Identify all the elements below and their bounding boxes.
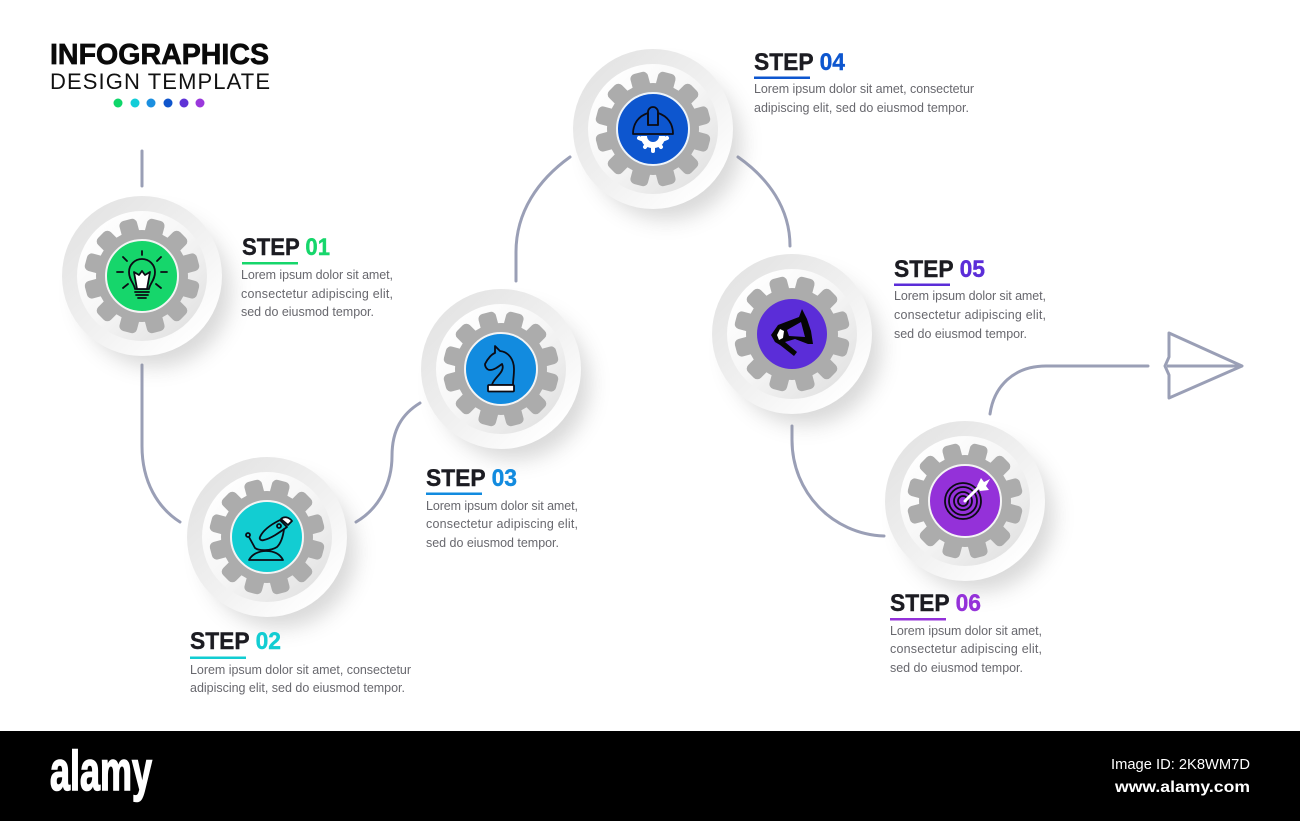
step 5 text: STEP 05 — [894, 256, 985, 283]
step 5 text — [894, 256, 1046, 341]
step 6 text: STEP 06 — [890, 590, 981, 617]
step 4 node — [573, 49, 742, 220]
step 4 text: Lorem ipsum dolor sit amet, consectetur — [754, 82, 974, 96]
step 2 text: STEP 02 — [190, 628, 281, 655]
step 1 text: consectetur adipiscing elit, — [241, 287, 393, 301]
step 5 text: consectetur adipiscing elit, — [894, 308, 1046, 322]
step 6 text: sed do eiusmod tempor. — [890, 661, 1023, 675]
step 2 text: adipiscing elit, sed do eiusmod tempor. — [190, 681, 405, 695]
footer bar — [0, 731, 1300, 821]
step 6 text: Lorem ipsum dolor sit amet, — [890, 624, 1042, 638]
icon: microscope — [246, 517, 292, 560]
step 6 text: consectetur adipiscing elit, — [890, 642, 1042, 656]
icon: light bulb — [117, 251, 167, 298]
colour dots — [114, 98, 204, 108]
step 3 text: STEP 03 — [426, 465, 517, 492]
step 3 node — [421, 289, 590, 460]
icon: helmet with gear — [633, 107, 673, 151]
step 6 text — [890, 590, 1042, 675]
step 1 text: STEP 01 — [242, 234, 330, 261]
step 2 text: Lorem ipsum dolor sit amet, consectetur — [190, 663, 411, 677]
step 2 node — [187, 457, 356, 628]
icon: paper plane arrow — [1165, 333, 1242, 398]
step 3 text: consectetur adipiscing elit, — [426, 517, 578, 531]
step 5 text: sed do eiusmod tempor. — [894, 327, 1027, 341]
image id text: Image ID: 2K8WM7D — [1111, 756, 1250, 773]
step 3 text: sed do eiusmod tempor. — [426, 536, 559, 550]
step 2 text — [190, 628, 411, 695]
step 4 text — [754, 49, 974, 115]
title: INFOGRAPHICS — [50, 39, 269, 71]
step 4 text: STEP 04 — [754, 49, 846, 76]
icon: megaphone — [771, 309, 813, 356]
step 3 text — [426, 465, 578, 550]
step 4 text: adipiscing elit, sed do eiusmod tempor. — [754, 101, 969, 115]
alamy logo: alamy — [50, 739, 152, 802]
step 6 node — [885, 421, 1054, 592]
step 1 text: sed do eiusmod tempor. — [241, 305, 374, 319]
connector path — [142, 151, 1148, 536]
step 3 text: Lorem ipsum dolor sit amet, — [426, 499, 578, 513]
step 5 text: Lorem ipsum dolor sit amet, — [894, 289, 1046, 303]
image id text: www.alamy.com — [1114, 779, 1250, 796]
title — [50, 39, 270, 94]
step 1 text: Lorem ipsum dolor sit amet, — [241, 268, 393, 282]
step 1 text — [241, 234, 393, 319]
icon: target with dart — [945, 478, 990, 519]
title: DESIGN TEMPLATE — [50, 69, 270, 94]
step 1 node — [62, 196, 231, 367]
step 5 node — [712, 254, 881, 425]
image id text — [1111, 756, 1250, 796]
icon: chess knight — [485, 346, 514, 392]
